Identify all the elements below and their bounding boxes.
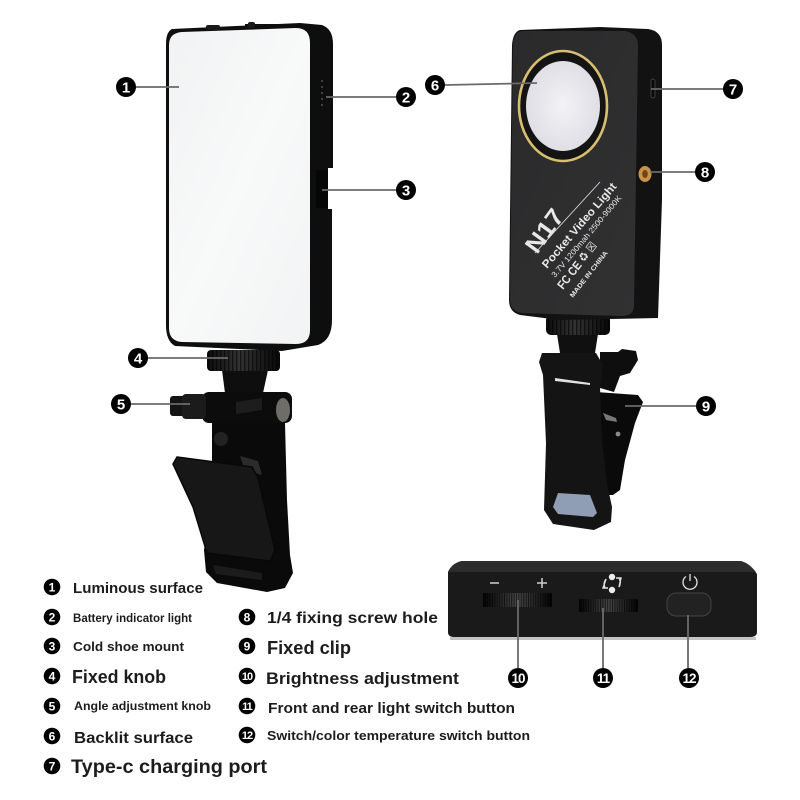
legend left column: 5 <box>49 700 56 714</box>
callout badges: 1 <box>122 80 130 96</box>
legend left column: Battery indicator light <box>73 613 192 625</box>
type-c port <box>651 79 655 98</box>
callout badges: 10 <box>511 671 525 686</box>
callout lines <box>131 83 723 668</box>
legend left column: Type-c charging port <box>71 757 268 778</box>
power button <box>667 593 711 616</box>
legend right column: 9 <box>244 640 251 654</box>
legend left column: Luminous surface <box>73 580 203 597</box>
callout badges: 4 <box>134 350 143 368</box>
rear clip <box>539 334 643 530</box>
legend right column: 10 <box>242 671 253 683</box>
legend left column: Angle adjustment knob <box>74 701 211 713</box>
screw hole <box>638 166 652 182</box>
clip window <box>553 493 597 517</box>
legend right column: 11 <box>242 701 253 713</box>
callout badges: 3 <box>402 182 410 200</box>
product markings: FC CE ♻ ☒ <box>554 239 600 292</box>
icon: minus and plus <box>490 578 547 588</box>
icon: power <box>683 574 697 589</box>
legend right column <box>239 609 530 743</box>
bottom view control edge <box>448 561 757 640</box>
legend right column: Front and rear light switch button <box>268 701 515 717</box>
callout badges: 9 <box>702 398 710 416</box>
legend left column: 3 <box>49 640 56 654</box>
callout badges: 6 <box>431 78 439 94</box>
product markings: N17 <box>520 204 570 259</box>
legend right column: 12 <box>242 730 253 742</box>
callout badges: 11 <box>597 671 611 686</box>
legend right column: Fixed clip <box>267 638 351 658</box>
legend left column: 2 <box>49 610 56 624</box>
legend left column: 7 <box>49 760 56 774</box>
rear knob <box>546 315 610 335</box>
legend left column: 6 <box>49 730 56 744</box>
callout badges <box>111 75 743 688</box>
legend right column: Brightness adjustment <box>266 669 459 688</box>
legend left column: Cold shoe mount <box>73 640 185 654</box>
brightness wheel <box>483 593 552 607</box>
callout badges: 8 <box>701 164 709 182</box>
product markings <box>520 181 624 299</box>
front body <box>166 23 333 351</box>
callout badges: 5 <box>117 396 125 414</box>
backlit ring <box>519 51 607 161</box>
legend left column: Backlit surface <box>74 730 193 747</box>
legend right column: Switch/color temperature switch button <box>267 728 530 743</box>
product markings: MADE IN CHINA <box>569 250 610 299</box>
legend left column: 1 <box>49 580 56 594</box>
front clip mount <box>170 370 293 592</box>
icon: swap <box>603 574 621 593</box>
battery indicator dots <box>321 80 323 106</box>
legend left column: Fixed knob <box>72 667 166 687</box>
rear view light assembly <box>509 27 662 530</box>
legend left column <box>44 579 268 778</box>
callout badges: 12 <box>682 671 696 686</box>
front rear switch wheel <box>579 599 638 612</box>
product markings: Pocket Video Light <box>540 181 620 271</box>
rear plate <box>510 31 638 316</box>
legend right column: 1/4 fixing screw hole <box>267 610 438 627</box>
legend right column: 8 <box>244 610 251 624</box>
luminous surface panel <box>169 28 310 344</box>
callout badges: 2 <box>402 90 410 106</box>
product markings: 3.7V 1200mah 2500-9000K <box>550 193 624 279</box>
fixed knob <box>207 350 280 371</box>
rear body <box>509 27 662 320</box>
front view light assembly <box>166 22 333 592</box>
callout badges: 7 <box>729 82 737 98</box>
legend left column: 4 <box>49 670 56 684</box>
